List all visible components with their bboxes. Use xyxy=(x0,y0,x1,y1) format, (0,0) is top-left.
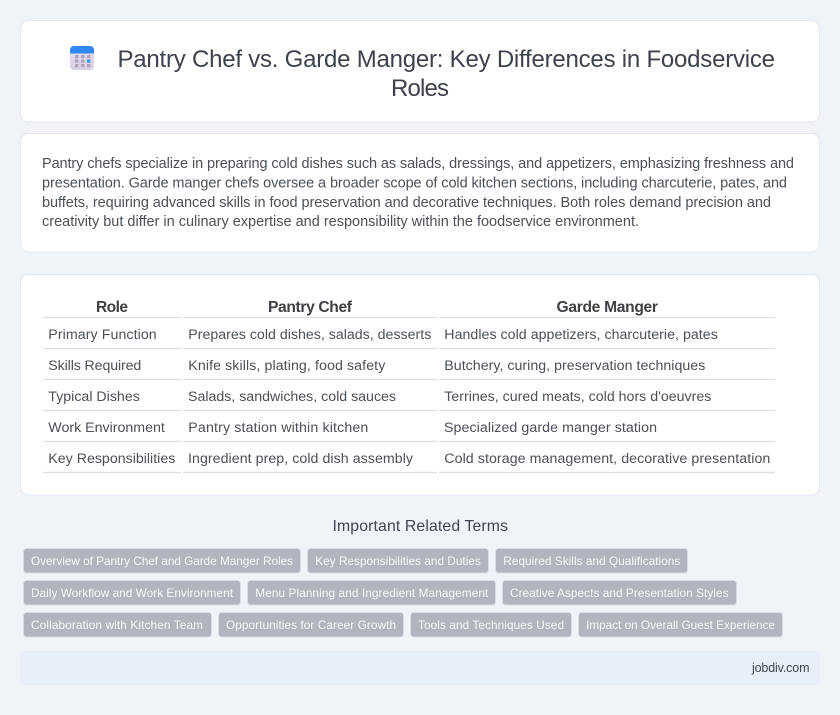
table row: primary function xyxy=(48,327,718,343)
tag: Impact on Overall Guest Experience xyxy=(586,618,775,632)
table row: work environment xyxy=(48,420,657,436)
title xyxy=(118,46,775,102)
tag xyxy=(578,612,782,637)
table row: skills required: Butchery, curing, preservation techniques xyxy=(444,358,705,374)
tag: Tools and Techniques Used xyxy=(418,618,564,632)
text block: introduction paragraph: Pantry chefs specialize in preparing cold dishes such as salads, dressings, and appetizers, emphasizing freshness and xyxy=(42,156,794,172)
table header row: Garde Manger xyxy=(556,299,658,316)
table row: typical dishes xyxy=(48,389,711,405)
table row: key responsibilities: Ingredient prep, cold dish assembly xyxy=(188,451,414,467)
tag xyxy=(24,548,300,573)
text block: introduction paragraph: creativity but differ in culinary expertise and responsibility within the foodservice environment. xyxy=(42,214,639,230)
panel: title card xyxy=(20,20,820,122)
table row: skills required: Knife skills, plating, food safety xyxy=(188,358,386,374)
heading: important related terms: Important Related Terms xyxy=(332,518,508,535)
table row: key responsibilities: Cold storage management, decorative presentation xyxy=(444,451,770,467)
table row: typical dishes: Salads, sandwiches, cold sauces xyxy=(188,389,396,405)
footer source text: jobdiv.com xyxy=(751,661,810,675)
tag xyxy=(24,612,212,637)
table header row: Role xyxy=(96,299,128,316)
tag: Collaboration with Kitchen Team xyxy=(31,618,203,632)
tag xyxy=(24,580,240,605)
table row: typical dishes: Terrines, cured meats, cold hors d'oeuvres xyxy=(444,389,711,405)
text block: introduction paragraph xyxy=(42,156,794,230)
tag: Required Skills and Qualifications xyxy=(503,554,680,568)
text block: introduction paragraph: buffets, requiring advanced skills in food preservation and decorative techniques. Both roles demand precision and xyxy=(42,195,771,211)
table row: typical dishes: Typical Dishes xyxy=(48,389,140,405)
table row: work environment: Pantry station within kitchen xyxy=(188,420,368,436)
tag: Overview of Pantry Chef and Garde Manger Roles xyxy=(31,554,293,568)
tag xyxy=(218,612,404,637)
footer xyxy=(20,651,820,685)
related terms tags xyxy=(24,548,782,637)
tag xyxy=(248,580,496,605)
title: Pantry Chef vs. Garde Manger: Key Differences in Foodservice xyxy=(118,46,775,73)
table header row xyxy=(96,299,658,316)
text block: introduction paragraph: presentation. Garde manger chefs oversee a broader scope of cold kitchen sections, including charcuterie, pates, and xyxy=(42,175,787,191)
panel: introduction xyxy=(20,134,820,252)
tag: Menu Planning and Ingredient Management xyxy=(255,586,489,600)
table row: skills required: Skills Required xyxy=(48,358,141,374)
tag: Creative Aspects and Presentation Styles xyxy=(510,586,729,600)
table row: primary function: Primary Function xyxy=(48,327,157,343)
tag: Daily Workflow and Work Environment xyxy=(31,586,234,600)
table row: key responsibilities xyxy=(48,451,770,467)
title: Roles xyxy=(391,75,449,102)
table row: work environment: Work Environment xyxy=(48,420,165,436)
table row: primary function: Prepares cold dishes, salads, desserts xyxy=(188,327,431,343)
table row: key responsibilities: Key Responsibilities xyxy=(48,451,175,467)
panel: comparison table xyxy=(20,274,820,495)
table row: work environment: Specialized garde manger station xyxy=(444,420,657,436)
tag xyxy=(502,580,736,605)
tag xyxy=(410,612,572,637)
table row: skills required xyxy=(48,358,705,374)
icon: calendar xyxy=(70,46,94,70)
table header row: Pantry Chef xyxy=(268,299,353,316)
tag: Opportunities for Career Growth xyxy=(226,618,396,632)
tag xyxy=(308,548,488,573)
tag: Key Responsibilities and Duties xyxy=(315,554,481,568)
tag xyxy=(496,548,688,573)
table row: primary function: Handles cold appetizers, charcuterie, pates xyxy=(444,327,718,343)
